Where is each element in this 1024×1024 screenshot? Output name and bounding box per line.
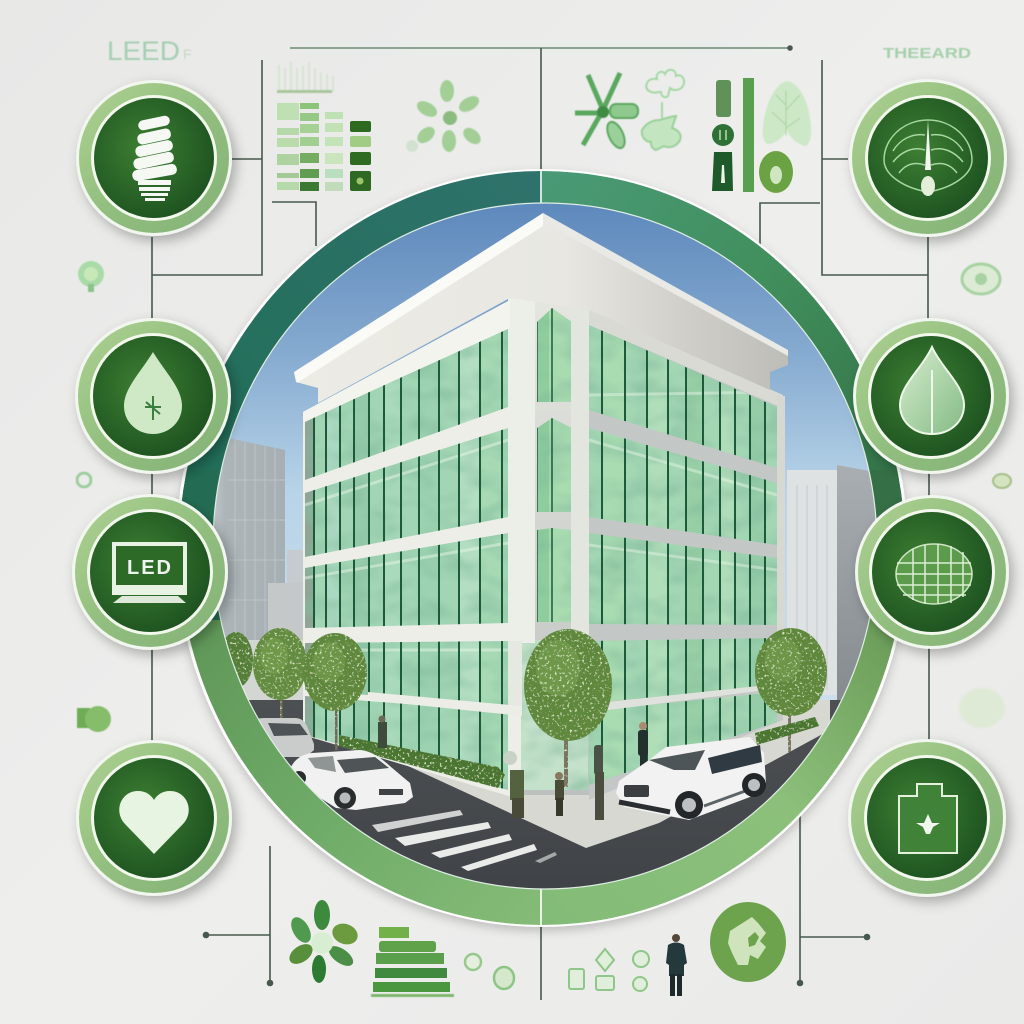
icon: small green ring two <box>494 967 514 989</box>
panel: top right icons <box>575 70 811 193</box>
badge: battery pack <box>848 739 1006 897</box>
badge: water drop <box>75 318 231 474</box>
right face <box>589 312 783 800</box>
main building <box>294 213 788 800</box>
icon: LED screen: LED <box>127 557 173 579</box>
crosswalk <box>372 810 557 871</box>
left main column <box>508 293 535 643</box>
background buildings <box>205 438 875 720</box>
icon: right round badge <box>962 264 1000 294</box>
icon: spiral bulb <box>131 115 178 201</box>
badge: light bulb <box>76 80 232 236</box>
badge: heart <box>76 740 232 896</box>
icon: heart <box>119 791 189 854</box>
right column <box>571 296 589 642</box>
left windows <box>305 329 508 790</box>
icon: leaf drop <box>900 347 964 434</box>
white van <box>616 737 766 820</box>
ground floor slab right <box>608 686 758 710</box>
faint bar chart <box>277 62 334 93</box>
trees <box>219 628 827 752</box>
badges <box>72 79 1009 897</box>
icon: small droplet gem <box>993 474 1011 488</box>
centre windows <box>520 300 588 800</box>
icon: small bulb <box>78 261 104 292</box>
icon: green star plant <box>575 73 638 151</box>
roof <box>294 213 788 422</box>
icon: four leaf flower <box>286 900 361 983</box>
central ring <box>165 160 916 938</box>
panel: bottom left icons <box>286 900 514 997</box>
icon: bar block dark top <box>716 80 731 117</box>
ground: sidewalk <box>408 700 830 848</box>
lower column <box>521 643 522 706</box>
white car <box>291 750 413 810</box>
icon: small green ring <box>465 954 481 970</box>
centre recess <box>522 295 589 795</box>
connector lines <box>152 46 929 1000</box>
icon: faded leaf flower <box>406 80 484 152</box>
icon: outline flower <box>642 70 684 150</box>
ring coloured quadrants <box>165 160 916 938</box>
small heading fragment: F <box>183 46 192 62</box>
badge: LED monitor <box>72 494 228 650</box>
icon: stacked bars <box>371 927 454 997</box>
icon: grid sphere <box>896 544 972 604</box>
people <box>378 716 648 820</box>
badge: solar grid <box>855 495 1009 649</box>
panel: bottom right icons <box>569 902 786 996</box>
icon: pale leaf <box>763 81 811 146</box>
icon: LED screen <box>112 542 187 603</box>
badge: leaf drop <box>853 318 1009 474</box>
icon: pale blob <box>959 688 1005 728</box>
icon: green disc <box>710 902 786 982</box>
swatch grid <box>277 103 371 191</box>
badge: leaf lung <box>849 79 1007 237</box>
foreground tree <box>524 629 612 787</box>
heading: right label: THEEARD <box>883 45 971 62</box>
panel: top left chart <box>277 62 484 191</box>
right windows <box>589 325 777 785</box>
icon: green circle <box>759 151 793 193</box>
icon: battery with leaf <box>899 784 957 853</box>
icon: small dark circle <box>712 124 734 146</box>
hedges <box>339 717 819 788</box>
ground: road <box>249 700 841 888</box>
heading: LEED label: LEED <box>107 36 180 66</box>
ground floor slab left <box>368 692 522 716</box>
right upper wall <box>589 308 783 408</box>
icon: small round mark <box>77 473 91 487</box>
icon: small marks <box>569 949 649 991</box>
icon: green hand <box>77 706 111 732</box>
icon: standing person <box>666 934 687 996</box>
photo: green building scene <box>205 200 880 900</box>
icon: leaf veins <box>884 120 972 196</box>
icon: dark trapezoid <box>712 152 733 191</box>
photo rim <box>213 203 877 889</box>
icon: drop with sprout <box>124 352 182 434</box>
left face <box>303 300 522 800</box>
icon: tall bar <box>743 78 754 192</box>
silver car <box>253 718 314 757</box>
end column <box>777 396 785 632</box>
small floating icons <box>77 261 1011 732</box>
ring outer white edge <box>176 169 908 927</box>
